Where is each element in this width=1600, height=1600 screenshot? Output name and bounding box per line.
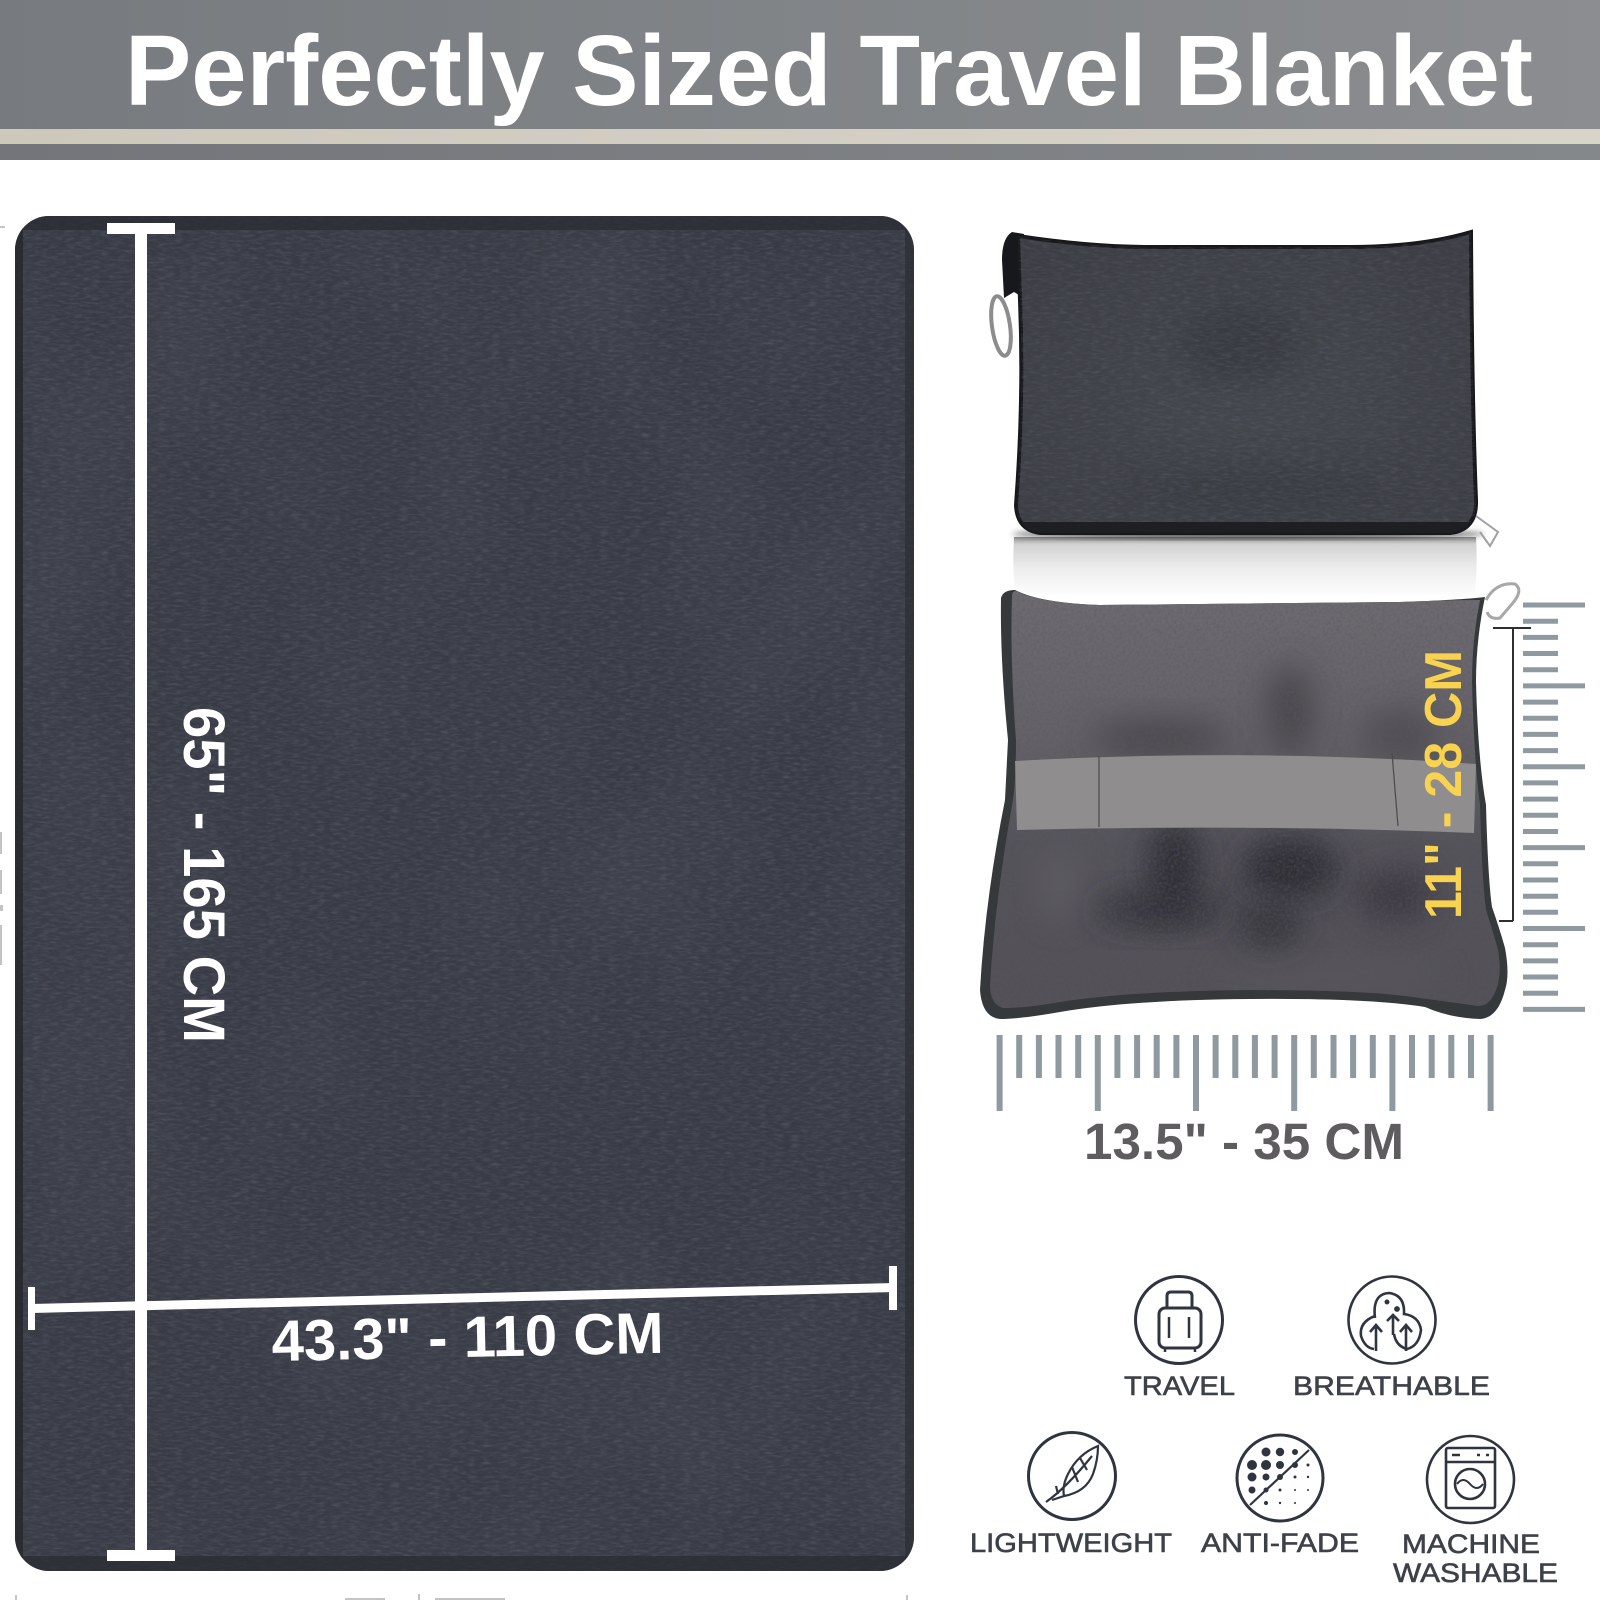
feature: breathable bbox=[1293, 1276, 1490, 1401]
zipper pull bbox=[1476, 516, 1498, 546]
label: BREATHABLE bbox=[1293, 1371, 1490, 1401]
icon: breathing fabric bbox=[1348, 1276, 1436, 1364]
label bbox=[1393, 1529, 1558, 1588]
elastic strap bbox=[1015, 755, 1476, 833]
icon: fading dots bbox=[1237, 1435, 1323, 1521]
icon: washing machine bbox=[1427, 1436, 1514, 1523]
label: LIGHTWEIGHT bbox=[970, 1528, 1172, 1558]
label: ANTI-FADE bbox=[1201, 1528, 1359, 1558]
cushion fur bbox=[985, 588, 1510, 1013]
label: WASHABLE bbox=[1393, 1558, 1558, 1588]
feature: anti-fade bbox=[1201, 1435, 1359, 1558]
dimension bracket bbox=[1493, 628, 1531, 921]
feature: travel bbox=[1124, 1276, 1235, 1401]
cushion carabiner bbox=[1486, 584, 1519, 618]
height measure bar bbox=[107, 223, 175, 1561]
cushion trim bbox=[980, 590, 1508, 1019]
label: TRAVEL bbox=[1124, 1371, 1235, 1401]
icon: suitcase bbox=[1136, 1276, 1222, 1364]
pouch strap bbox=[1002, 232, 1024, 298]
cushion height label: 11" - 28 CM bbox=[1415, 650, 1473, 919]
cushion width label: 13.5" - 35 CM bbox=[1084, 1113, 1404, 1170]
label: MACHINE bbox=[1402, 1529, 1540, 1559]
pouch body bbox=[1016, 232, 1476, 533]
icon: feather bbox=[1028, 1432, 1116, 1520]
carabiner clip bbox=[988, 295, 1014, 357]
width label: 43.3" - 110 CM bbox=[271, 1301, 664, 1374]
panel: unfolded blanket bbox=[15, 216, 914, 1571]
panel: carry pouch bbox=[988, 230, 1498, 598]
panel: folded cushion bbox=[980, 584, 1519, 1019]
height label: 65" - 165 CM bbox=[171, 707, 236, 1043]
horizontal ruler bbox=[1000, 1035, 1491, 1111]
strap stitches bbox=[1099, 753, 1398, 827]
header band bbox=[0, 0, 1600, 160]
width measure bar bbox=[28, 1266, 897, 1330]
pouch shadow bbox=[1012, 529, 1484, 539]
title: Perfectly Sized Travel Blanket bbox=[125, 15, 1533, 127]
pouch reflection bbox=[1013, 537, 1477, 598]
feature: lightweight bbox=[970, 1432, 1172, 1558]
feature: machine washable bbox=[1393, 1436, 1558, 1588]
vertical ruler bbox=[1523, 605, 1585, 1009]
